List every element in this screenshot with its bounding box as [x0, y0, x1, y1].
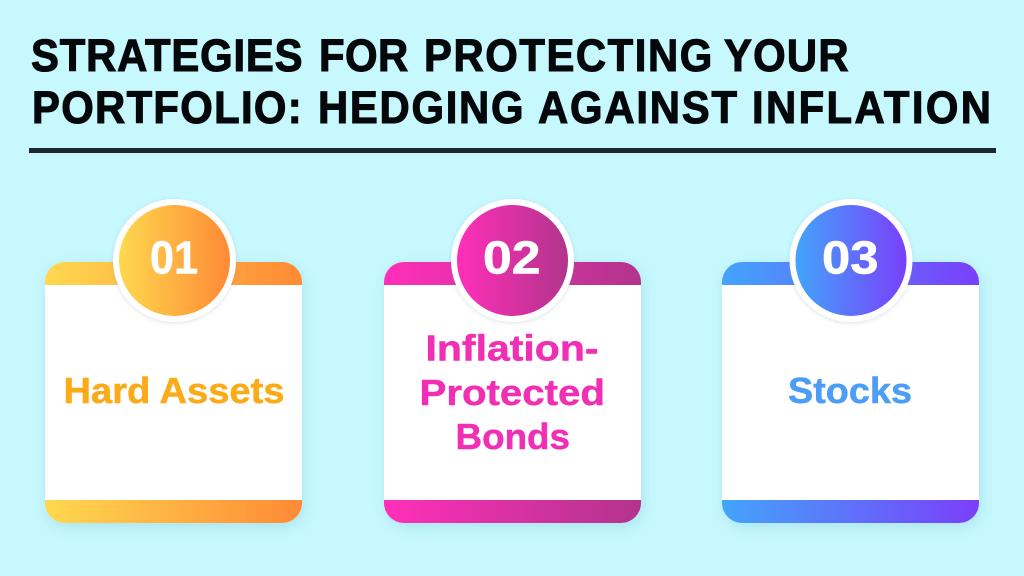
card 2 body — [384, 262, 641, 523]
title: FOR — [319, 32, 408, 81]
title — [31, 32, 991, 133]
card 1 body — [45, 262, 302, 523]
card 1 badge — [113, 199, 236, 322]
card 2 bottom band — [384, 500, 641, 523]
panel: card 3 Stocks — [722, 199, 979, 523]
card 1 badge: 01 — [150, 232, 198, 284]
card 3 label: Stocks — [788, 370, 912, 411]
title: HEDGING — [318, 84, 524, 133]
panel: card 1 Hard Assets — [45, 199, 302, 523]
card 1 label: Hard Assets — [64, 370, 284, 411]
title: YOUR — [724, 32, 849, 81]
title: PORTFOLIO: — [32, 84, 302, 133]
card 2 badge — [451, 199, 574, 322]
card 3 badge — [790, 199, 912, 322]
title: PROTECTING — [424, 32, 712, 81]
card 2 label: Inflation- — [426, 328, 598, 368]
card 3 bottom band — [722, 500, 979, 523]
title: AGAINST — [538, 84, 737, 133]
card 2 badge: 02 — [483, 232, 540, 284]
card 2 top band — [384, 262, 641, 285]
card 1 bottom band — [45, 500, 302, 523]
card 2 label: Bonds — [456, 416, 570, 457]
title: STRATEGIES — [31, 32, 303, 81]
card 2 label: Protected — [420, 372, 605, 413]
card 3 badge: 03 — [822, 232, 878, 284]
title: INFLATION — [752, 84, 991, 133]
card 1 top band — [45, 262, 302, 285]
card 2 label — [420, 328, 605, 457]
title underline — [29, 148, 996, 153]
card 3 body — [722, 262, 979, 523]
panel: card 2 Inflation-Protected Bonds — [384, 199, 641, 523]
card 3 top band — [722, 262, 979, 285]
